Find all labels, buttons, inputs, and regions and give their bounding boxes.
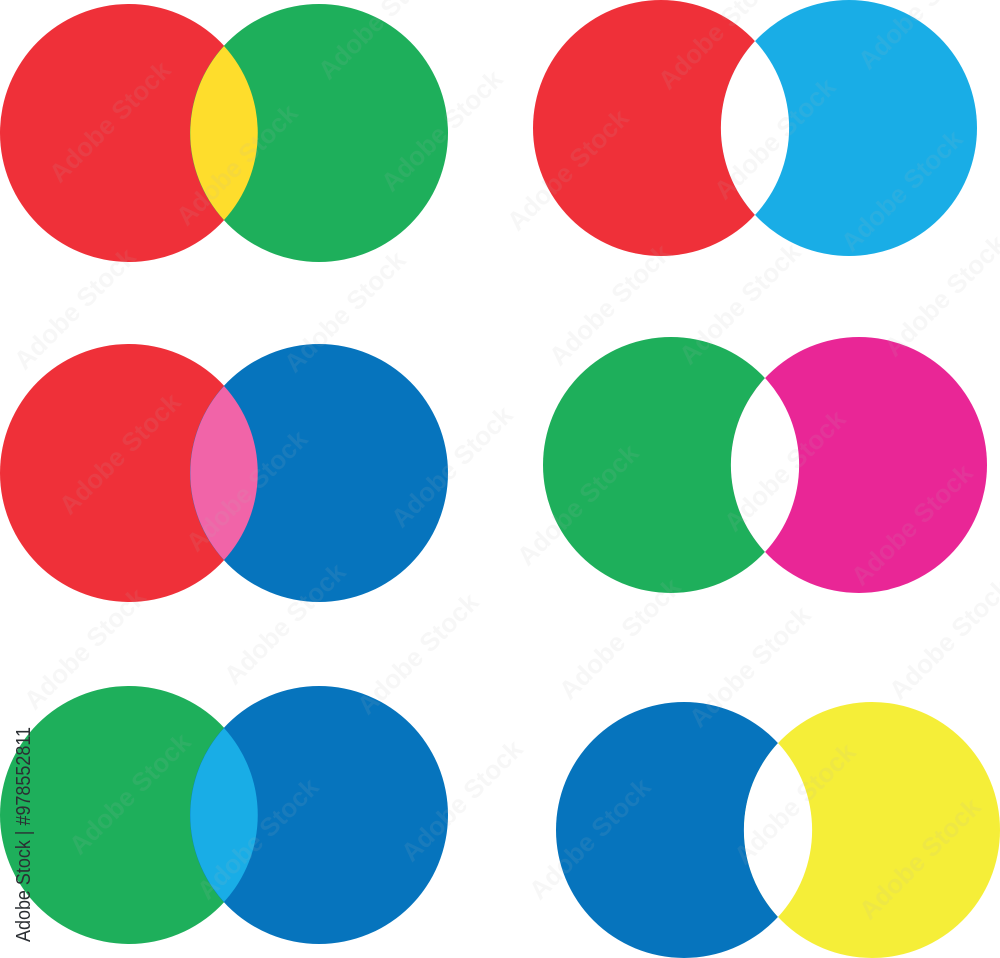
watermark pattern: Adobe Stock: [63, 726, 197, 860]
watermark pattern: Adobe Stock: [673, 236, 807, 370]
watermark pattern: Adobe Stock: [53, 386, 187, 520]
vertical stock credit: Adobe Stock | #978552811: [13, 727, 35, 942]
panel: green and blue make cyan: [0, 686, 448, 944]
watermark pattern: Adobe Stock: [385, 399, 519, 533]
panel: red and green make yellow: [0, 4, 448, 262]
panel: blue and yellow make white: [556, 702, 1000, 958]
watermark pattern: Adobe Stock: [8, 241, 142, 375]
panel: red and blue make pink: [0, 344, 448, 602]
panel: green and magenta make white: [543, 337, 987, 593]
watermark pattern: Adobe Stock: [543, 237, 677, 371]
watermark pattern: Adobe Stock: [191, 771, 325, 905]
watermark pattern: Adobe Stock: [835, 123, 969, 257]
watermark pattern: Adobe Stock: [501, 102, 635, 236]
watermark pattern: Adobe Stock: [523, 771, 657, 905]
watermark pattern: Adobe Stock: [180, 423, 314, 557]
watermark pattern: Adobe Stock: [375, 63, 509, 197]
watermark pattern: Adobe Stock: [395, 733, 529, 867]
watermark pattern: Adobe Stock: [351, 586, 485, 720]
watermark pattern: Adobe Stock: [170, 97, 304, 231]
watermark pattern: Adobe Stock: [278, 244, 412, 378]
watermark pattern: Adobe Stock: [718, 403, 852, 537]
panel: red and cyan make white: [533, 0, 977, 256]
watermark pattern: Adobe Stock: [708, 71, 842, 205]
watermark pattern: Adobe Stock: [553, 571, 687, 705]
watermark pattern: Adobe Stock: [853, 791, 987, 925]
watermark pattern: Adobe Stock: [511, 437, 645, 571]
watermark pattern: Adobe Stock: [683, 599, 817, 733]
watermark pattern: Adobe Stock: [43, 54, 177, 188]
watermark pattern: Adobe Stock: [218, 556, 352, 690]
watermark pattern: Adobe Stock: [728, 736, 862, 870]
watermark pattern: Adobe Stock: [18, 581, 152, 715]
watermark pattern: Adobe Stock: [845, 457, 979, 591]
